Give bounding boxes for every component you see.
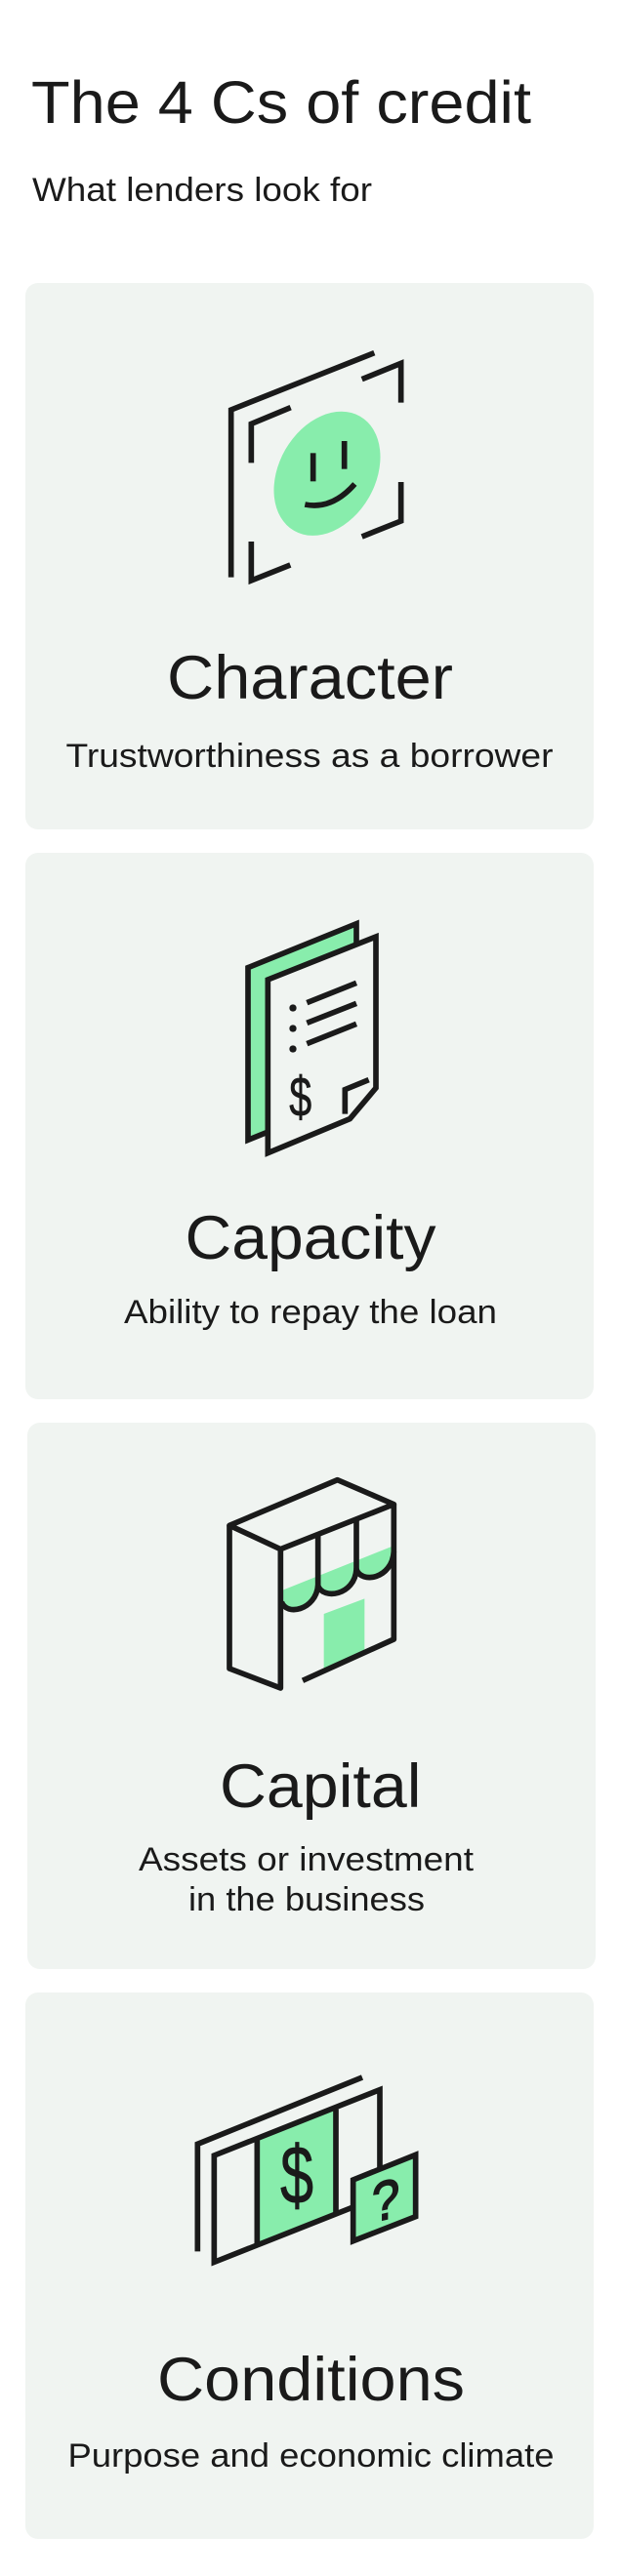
panel: conditions (25, 1992, 594, 2539)
panel: capital (27, 1423, 596, 1969)
panel: character (25, 283, 594, 829)
description: character: Trustworthiness as a borrower (66, 738, 553, 775)
heading: capacity: Capacity (186, 1204, 436, 1272)
icon: banknote with question mark: ? (372, 2166, 399, 2234)
description: capital: in the business (188, 1881, 425, 1918)
title: The 4 Cs of credit (31, 69, 531, 136)
icon: smiling face in frame (231, 353, 402, 581)
icon: banknote with question mark (197, 2077, 416, 2262)
icon: financial documents (248, 924, 376, 1153)
icon: banknote with question mark: $ (280, 2128, 313, 2221)
subtitle: What lenders look for (32, 172, 372, 209)
description: conditions: Purpose and economic climate (68, 2437, 555, 2475)
description: capital: Assets or investment (139, 1841, 475, 1878)
description: capacity: Ability to repay the loan (124, 1294, 497, 1331)
heading: conditions: Conditions (157, 2346, 465, 2414)
panel: capacity (25, 853, 594, 1399)
heading: capital: Capital (220, 1752, 422, 1821)
heading: character: Character (167, 644, 453, 712)
description: capital (139, 1841, 475, 1918)
icon: storefront (229, 1480, 393, 1688)
icon: financial documents: $ (289, 1066, 311, 1128)
